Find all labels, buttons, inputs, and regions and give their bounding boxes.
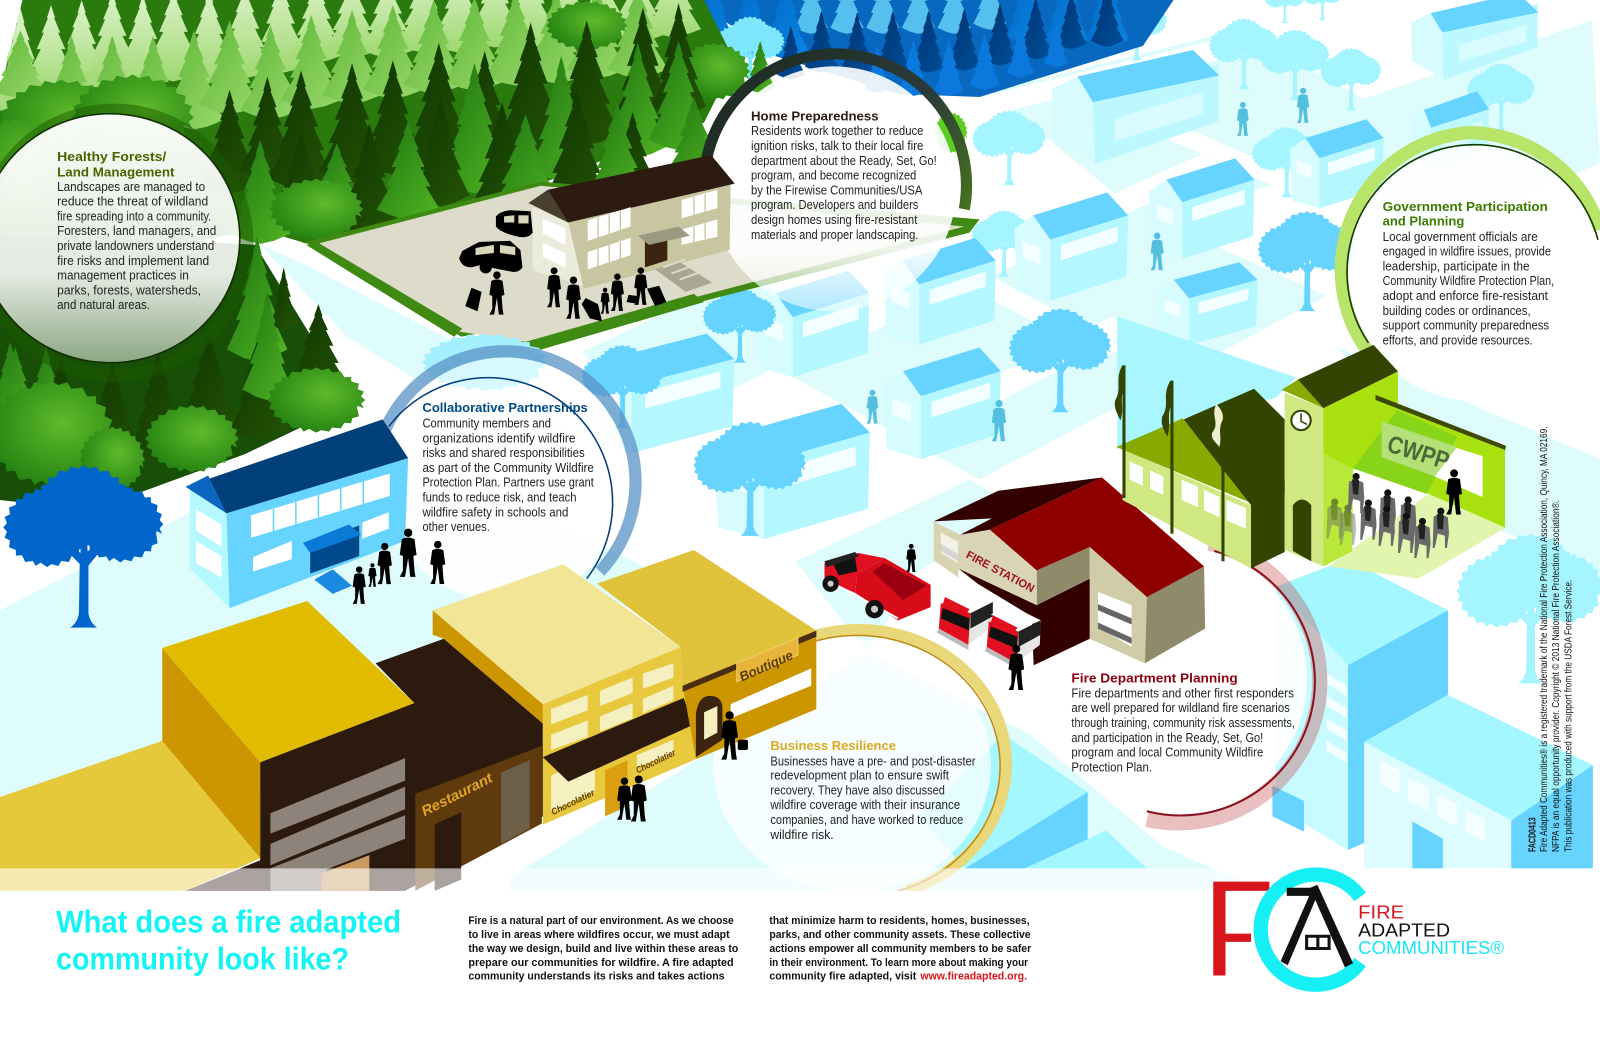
- text block: Fire Department Planning: Protection Plan.: [1071, 759, 1152, 774]
- logo wordmark: FIRE: [1358, 901, 1404, 922]
- SUV 2: [496, 210, 533, 237]
- big shop: [162, 648, 260, 858]
- intro paragraph left: Fire is a natural part of our environment. As we choose: [468, 915, 734, 927]
- house: [1157, 262, 1258, 345]
- text block: Government Participation: [1383, 199, 1554, 347]
- text block: Home Preparedness: program. Developers and builders: [751, 197, 918, 212]
- intro paragraph left: prepare our communities for wildfire. A fire adapted: [468, 957, 734, 969]
- heading: Business Resilience: [770, 738, 896, 753]
- bush near road: [269, 179, 363, 240]
- title: What does a fire adapted: [56, 904, 401, 940]
- panel: government ring and disc: [1341, 133, 1600, 401]
- heading: Fire Department Planning: [1071, 671, 1238, 686]
- mid conifers: [230, 41, 775, 244]
- text block: Fire Department Planning: and participation in the Ready, Set, Go!: [1071, 730, 1263, 745]
- text block: Government Participation: building codes or ordinances,: [1383, 303, 1531, 318]
- text block: Government Participation: Community Wildfire Protection Plan,: [1383, 273, 1554, 288]
- house: [1290, 119, 1384, 208]
- pickup: [822, 552, 931, 620]
- text block: Healthy Forests: fire spreading into a community.: [57, 208, 211, 223]
- text block: Home Preparedness: program, and become recognized: [751, 168, 916, 183]
- title: community look like?: [56, 940, 349, 976]
- evacuating family: [465, 267, 666, 321]
- text block: Collaborative Partnerships: organizations identify wildfire: [422, 430, 576, 445]
- panel: business ring and disc: [713, 630, 1006, 892]
- entrance: [310, 526, 359, 573]
- intro paragraph right: www.fireadapted.org.: [919, 971, 1027, 983]
- text block: Home Preparedness: department about the Ready, Set, Go!: [751, 153, 937, 168]
- text block: Collaborative Partnerships: other venues.: [422, 519, 490, 534]
- speaker: [1446, 469, 1462, 514]
- text block: Collaborative Partnerships: funds to reduce risk, and teach: [422, 490, 577, 505]
- flags: [1115, 365, 1224, 561]
- text block: Government Participation: adopt and enforce fire-resistant: [1383, 288, 1548, 303]
- panel: fire dept ring and disc: [1040, 543, 1320, 823]
- house: [1149, 158, 1254, 259]
- text block: Home Preparedness: [751, 108, 937, 242]
- driveway: [313, 186, 964, 342]
- panel: collaborative ring and disc: [382, 334, 636, 602]
- pale building lower centre: [918, 735, 1088, 868]
- lower conifers: [0, 237, 287, 451]
- text block: Fire Department Planning: [1071, 671, 1295, 774]
- SUV: [459, 241, 522, 272]
- large pale buildings lower right: [1276, 559, 1448, 665]
- boutique: [597, 550, 816, 686]
- firefighter 2: [906, 544, 916, 572]
- heading: Home Preparedness: [751, 108, 879, 123]
- text block: Business Resilience: recovery. They have also discussed: [770, 782, 945, 797]
- fire engine: [937, 589, 993, 650]
- intro paragraph right: in their environment. To learn more about making your: [769, 957, 1029, 969]
- firefighter: [1008, 645, 1024, 690]
- text block: Healthy Forests: fire risks and implement land: [57, 253, 209, 268]
- text block: Healthy Forests: [57, 149, 216, 312]
- text block: Home Preparedness: ignition risks, talk to their local fire: [751, 138, 923, 153]
- house: [1052, 50, 1219, 164]
- intro paragraph right: community fire adapted, visit: [769, 971, 917, 983]
- steps: [655, 261, 712, 292]
- text block: Healthy Forests: Foresters, land managers, and: [57, 223, 216, 238]
- chocolatier: [433, 610, 543, 723]
- heading: Collaborative Partnerships: [422, 400, 588, 415]
- forest floor: [0, 0, 735, 245]
- house: [1014, 192, 1128, 301]
- text block: Business Resilience: Businesses have a pre- and post-disaster: [770, 753, 976, 768]
- vertical credits: [1528, 427, 1574, 852]
- chocolatier signs: Chocolatier: [550, 787, 596, 817]
- vertical credits: This publication was produced with support from the USDA Forest Service.: [1563, 580, 1574, 852]
- intro paragraph left: [468, 915, 739, 983]
- text block: Business Resilience: wildfire risk.: [769, 827, 834, 842]
- panel: home preparedness ring and disc: [706, 54, 966, 311]
- bushes along lower forest: [0, 367, 365, 492]
- intro paragraph left: the way we design, build and live within these areas to: [468, 943, 739, 955]
- text block: Fire Department Planning: Fire departments and other first responders: [1071, 685, 1294, 700]
- people at community centre: [353, 529, 445, 604]
- house: [584, 334, 734, 453]
- house: [714, 404, 870, 539]
- intro paragraph right: actions empower all community members to be safer: [769, 943, 1032, 955]
- text block: Home Preparedness: Residents work together to reduce: [751, 123, 923, 138]
- text block: Business Resilience: [769, 738, 976, 842]
- pale blue pedestrians: [867, 88, 1309, 441]
- text block: Fire Department Planning: through training, community risk assessments,: [1071, 715, 1295, 730]
- text block: Business Resilience: companies, and have worked to reduce: [770, 812, 963, 827]
- text block: Government Participation: support community preparedness: [1383, 318, 1549, 333]
- boutique sign: Boutique: [737, 647, 795, 684]
- shoppers: [617, 711, 748, 822]
- intro paragraph right: parks, and other community assets. These collective: [769, 929, 1031, 941]
- intro paragraph left: community understands its risks and takes actions: [468, 971, 724, 983]
- dark blue tree: [3, 465, 163, 628]
- text block: Government Participation: efforts, and provide resources.: [1383, 332, 1533, 347]
- medium blue trees: [581, 211, 1356, 536]
- hedge lower right: [526, 294, 704, 352]
- hedge lower left: [306, 243, 462, 337]
- text block: Healthy Forests: reduce the threat of wildland: [57, 194, 208, 209]
- text block: Home Preparedness: design homes using fire-resistant: [751, 212, 918, 227]
- heading: Healthy Forests/: [57, 149, 167, 164]
- blue conifers at top: [694, 0, 1173, 97]
- text block: Government Participation: leadership, participate in the: [1383, 258, 1530, 273]
- house: [1411, 0, 1538, 80]
- logo cyan C: [1261, 874, 1360, 985]
- group: background pale houses and trees: [581, 0, 1600, 868]
- vertical credits: Fire Adapted Communities® is a registered trademark of the National Fire Protection Association, Quincy, MA 02169.: [1539, 427, 1550, 852]
- forest upper and lower: [0, 0, 1173, 628]
- text block: Healthy Forests: and natural areas.: [57, 297, 150, 312]
- text block: Collaborative Partnerships: as part of the Community Wildfire: [422, 460, 594, 475]
- text block: Government Participation: Local government officials are: [1383, 229, 1538, 244]
- door: [645, 234, 667, 267]
- heading: Government Participation: [1383, 199, 1548, 214]
- intro paragraph right: that minimize harm to residents, homes, businesses,: [769, 915, 1030, 927]
- building: blue community centre: [186, 419, 445, 608]
- CWPP label: CWPP: [1384, 431, 1452, 475]
- vertical credits: NFPA is an equal opportunity provider. Copyright © 2013 National Fire Protection Association®.: [1551, 500, 1562, 852]
- text block: Collaborative Partnerships: wildfire safety in schools and: [422, 504, 568, 519]
- bright bush right of home circle: [935, 112, 967, 153]
- front bright conifers: [376, 97, 721, 219]
- pale civic building behind town hall: [1117, 316, 1296, 449]
- heading: [1383, 199, 1548, 229]
- text block: Healthy Forests: management practices in: [57, 268, 189, 283]
- logo: Fire Adapted Communities: ADAPTED: [1358, 920, 1450, 941]
- bushes beside upper forest: [0, 1, 750, 219]
- text block: Healthy Forests: Landscapes are managed to: [57, 179, 205, 194]
- neighbourhood road lines: [714, 31, 1480, 541]
- text block: Healthy Forests: private landowners understand: [57, 238, 214, 253]
- text block: Government Participation: engaged in wildfire issues, provide: [1383, 244, 1551, 259]
- house: [884, 348, 1001, 459]
- text block: Collaborative Partnerships: Protection Plan. Partners use grant: [422, 475, 594, 490]
- text block: Collaborative Partnerships: Community members and: [422, 416, 551, 431]
- heading: Land Management: [57, 165, 175, 180]
- cyan tree among blue conifers: [715, 16, 785, 87]
- awning: [543, 698, 694, 782]
- text block: Fire Department Planning: program and local Community Wildfire: [1071, 745, 1263, 760]
- front dark conifers: [273, 90, 660, 238]
- boutique door: [696, 696, 722, 757]
- logo: Fire Adapted Communities: [1213, 874, 1505, 985]
- title: [56, 904, 401, 976]
- house: [757, 271, 869, 377]
- text block: Business Resilience: wildfire coverage with their insurance: [770, 797, 960, 812]
- restaurant: [415, 746, 542, 891]
- logo: Fire Adapted Communities: COMMUNITIES®: [1358, 937, 1505, 958]
- building: home: [459, 155, 735, 321]
- footer white: [0, 891, 1600, 1044]
- hedge: [302, 182, 980, 352]
- building: shops row: Chocolatier: [634, 747, 677, 775]
- sidewalk: [0, 741, 260, 891]
- restaurant sign: Restaurant: [419, 770, 497, 820]
- pale back conifers: [0, 0, 701, 117]
- CWPP screen: [1435, 446, 1483, 497]
- heading: [57, 149, 175, 180]
- panel: healthy forests ring and disc: [0, 110, 247, 376]
- back dark conifers: [201, 3, 706, 194]
- town hall door: [1293, 499, 1311, 561]
- text block: Business Resilience: redevelopment plan to ensure swift: [770, 768, 949, 783]
- logo letter F: [1213, 882, 1269, 976]
- text block: Healthy Forests: parks, forests, watersheds,: [57, 282, 201, 297]
- intro paragraph right: [769, 915, 1032, 983]
- text block: Collaborative Partnerships: [422, 400, 594, 534]
- text block: Home Preparedness: materials and proper landscaping.: [751, 227, 918, 242]
- audience: [1327, 473, 1449, 558]
- house: [1412, 91, 1489, 171]
- vertical credits: FACD0413: [1528, 817, 1539, 852]
- home preparedness lot: [302, 182, 980, 352]
- pale trees behind houses: [971, 0, 1600, 684]
- text block: Collaborative Partnerships: risks and shared responsibilities: [422, 445, 585, 460]
- bottom fade band: [0, 868, 1600, 891]
- building: town hall: [1115, 345, 1506, 579]
- text block: Fire Department Planning: are well prepared for wildland fire scenarios: [1071, 700, 1290, 715]
- fire station sign: FIRE STATION: [964, 549, 1036, 595]
- fire engine 2: [985, 607, 1041, 668]
- house: [884, 238, 996, 345]
- logo A house: [1281, 885, 1353, 967]
- text block: Home Preparedness: by the Firewise Communities/USA: [751, 182, 923, 197]
- clock: [1291, 411, 1311, 430]
- building: shops row: [0, 550, 816, 891]
- heading: and Planning: [1383, 214, 1464, 229]
- intro paragraph left: to live in areas where wildfires occur, we must adapt: [468, 929, 730, 941]
- building: fire station: [822, 478, 1205, 690]
